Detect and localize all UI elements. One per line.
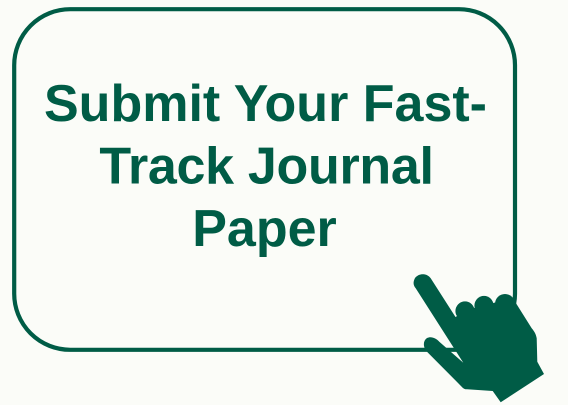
title: submit your fast-track journal paper: Track Journal xyxy=(99,138,434,196)
title: submit your fast-track journal paper: Paper xyxy=(192,200,337,258)
panel: rounded button outline xyxy=(14,9,515,350)
icon: pointing hand xyxy=(414,274,544,402)
title: submit your fast-track journal paper: Submit Your Fast- xyxy=(44,75,487,133)
title: submit your fast-track journal paper xyxy=(44,75,487,258)
